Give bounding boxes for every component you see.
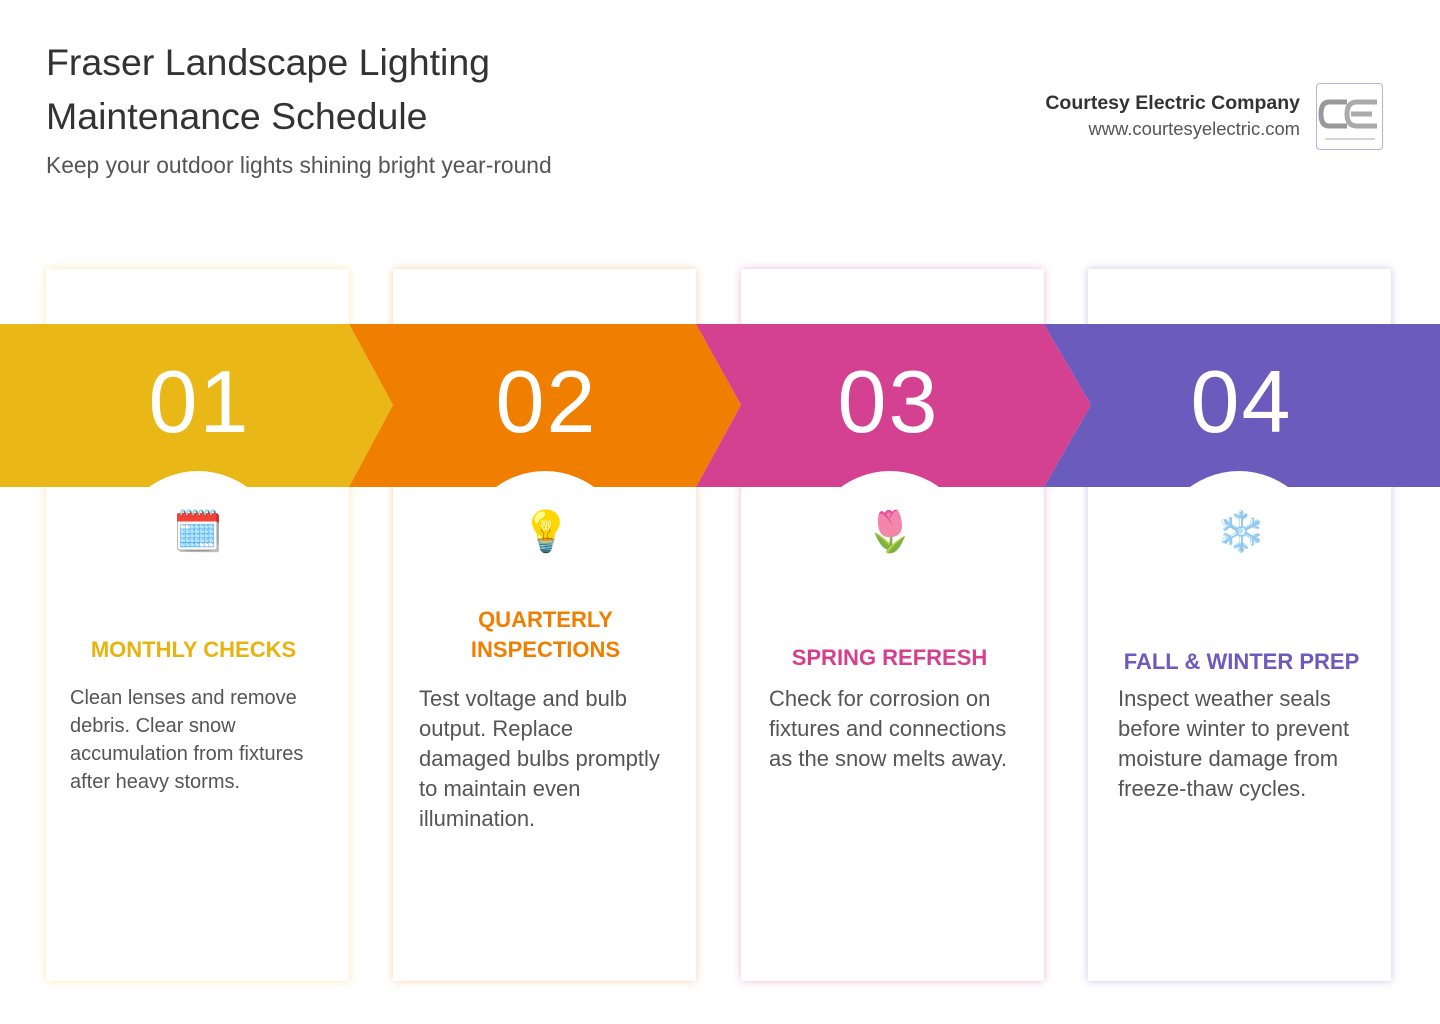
- number 03: 03: [838, 352, 939, 451]
- company info: Courtesy Electric Company: [1045, 92, 1300, 114]
- number 04: 04: [1191, 352, 1292, 451]
- text 1: Clean lenses and remove debris. Clear snow accumulation from fixtures after heavy storms.: [70, 687, 303, 793]
- icon: calendar: 🗓️: [173, 510, 223, 554]
- text 4: Inspect weather seals before winter to prevent moisture damage from freeze-thaw cycles.: [1118, 686, 1349, 801]
- heading 4: FALL & WINTER PREP: [1124, 649, 1359, 674]
- logo: [1316, 83, 1383, 150]
- number 01: 01: [149, 352, 250, 451]
- company info: www.courtesyelectric.com: [1088, 118, 1300, 139]
- heading 2: [471, 607, 620, 662]
- text 2: Test voltage and bulb output. Replace damaged bulbs promptly to maintain even illumination.: [419, 686, 660, 831]
- icon: tulip: 🌷: [865, 510, 915, 554]
- number 02: 02: [496, 352, 597, 451]
- card 1: [46, 269, 349, 981]
- title: [46, 41, 490, 137]
- heading 2: QUARTERLY: [478, 607, 613, 632]
- icon: bulb: 💡: [521, 510, 571, 554]
- subtitle: Keep your outdoor lights shining bright year-round: [46, 152, 552, 178]
- card 3: [741, 269, 1044, 981]
- title: Maintenance Schedule: [46, 95, 428, 137]
- heading 2: INSPECTIONS: [471, 637, 620, 662]
- title: Fraser Landscape Lighting: [46, 41, 490, 83]
- heading 1: MONTHLY CHECKS: [91, 637, 296, 662]
- company info: [1045, 92, 1300, 139]
- card 2: [393, 269, 696, 981]
- heading 3: SPRING REFRESH: [792, 645, 987, 670]
- icon: snowflake: ❄️: [1216, 510, 1266, 554]
- card 4: [1088, 269, 1391, 981]
- text 3: Check for corrosion on fixtures and connections as the snow melts away.: [769, 686, 1007, 771]
